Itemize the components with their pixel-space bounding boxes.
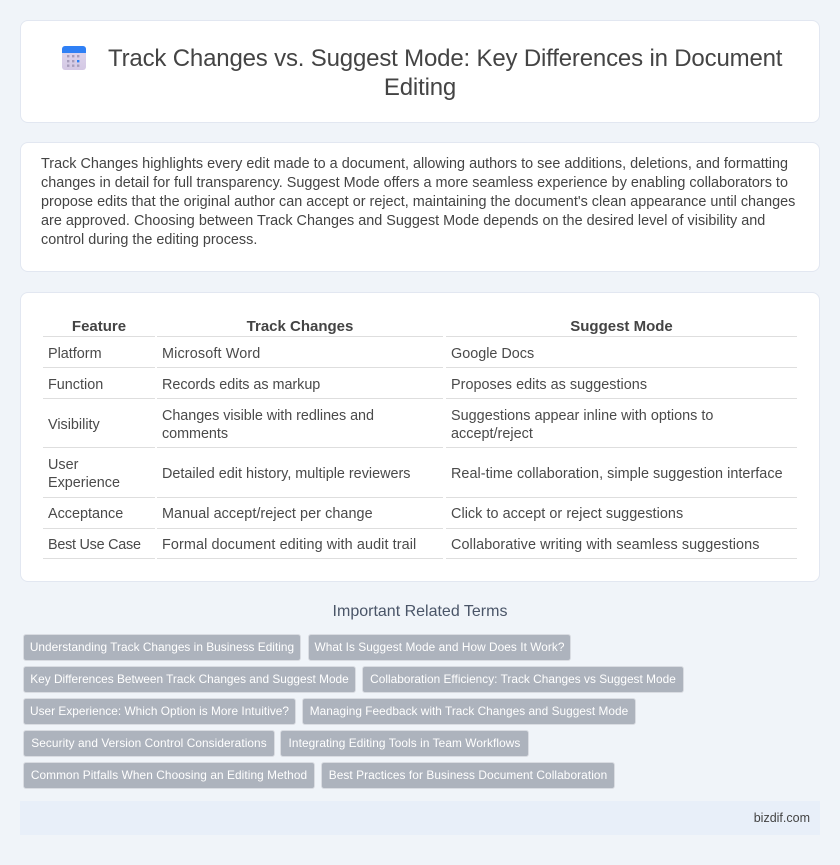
row: Visibility: Visibility (48, 417, 100, 433)
table header: Suggest Mode: Suggest Mode (570, 318, 673, 335)
title line 1: Track Changes vs. Suggest Mode: Key Differences in Document (108, 45, 782, 72)
Acceptance: Suggest Mode: Click to accept or reject suggestions (451, 506, 683, 522)
User Experience: Track Changes: Detailed edit history, multiple reviewers (162, 466, 410, 482)
panel: title card (20, 20, 820, 123)
panel: summary card (20, 142, 820, 272)
Platform: Suggest Mode: Google Docs (451, 346, 534, 362)
tag: Managing Feedback with Track Changes and Suggest Mode (310, 704, 628, 718)
tag: Understanding Track Changes in Business Editing (30, 640, 294, 654)
summary paragraph: Track Changes highlights every edit made to a document, allowing authors to see additions, deletions, and formatting (41, 156, 788, 172)
footer bar (20, 801, 820, 835)
tag (23, 634, 301, 661)
row: Acceptance: Acceptance (48, 506, 123, 522)
tag (362, 666, 684, 693)
icon: calendar (62, 46, 86, 70)
Best Use Case: Track Changes: Formal document editing with audit trail (162, 537, 416, 553)
related terms heading: Important Related Terms (333, 603, 507, 620)
Visibility: Suggest Mode: Suggestions appear inline with options to (451, 408, 713, 424)
Visibility: Track Changes: comments (162, 426, 228, 442)
Acceptance: Track Changes: Manual accept/reject per change (162, 506, 373, 522)
tag: Best Practices for Business Document Collaboration (329, 768, 607, 782)
tag: Collaboration Efficiency: Track Changes vs Suggest Mode (370, 672, 676, 686)
row: User Experience: User (48, 457, 78, 473)
tag (23, 730, 275, 757)
summary paragraph: propose edits that the original author can accept or reject, maintaining the document's clean appearance until changes (41, 194, 795, 210)
Function: Track Changes: Records edits as markup (162, 377, 320, 393)
tag (302, 698, 636, 725)
row: Function: Function (48, 377, 103, 393)
title line 2: Editing (384, 74, 456, 101)
tag: User Experience: Which Option is More Intuitive? (30, 704, 289, 718)
tag: Security and Version Control Considerations (31, 736, 267, 750)
tag (23, 762, 315, 789)
row: Platform: Platform (48, 346, 102, 362)
row: User Experience: Experience (48, 475, 120, 491)
table header: Feature: Feature (72, 318, 126, 335)
tag: Integrating Editing Tools in Team Workflows (289, 736, 520, 750)
summary paragraph (41, 156, 795, 248)
Visibility: Suggest Mode: accept/reject (451, 426, 533, 442)
summary paragraph: control during the editing process. (41, 232, 257, 248)
tag: Key Differences Between Track Changes and Suggest Mode (30, 672, 349, 686)
tag: What Is Suggest Mode and How Does It Work? (314, 640, 565, 654)
summary paragraph: are approved. Choosing between Track Changes and Suggest Mode depends on the desired level of visibility and (41, 213, 765, 229)
row: User Experience (48, 457, 120, 491)
tag (308, 634, 571, 661)
tag: Common Pitfalls When Choosing an Editing Method (31, 768, 307, 782)
table header: Track Changes: Track Changes (247, 318, 353, 335)
Function: Suggest Mode: Proposes edits as suggestions (451, 377, 647, 393)
Visibility: Track Changes (162, 408, 374, 442)
Platform: Track Changes: Microsoft Word (162, 346, 260, 362)
tag (321, 762, 615, 789)
footer source: bizdif.com (754, 811, 810, 825)
panel: comparison table card (20, 292, 820, 582)
Best Use Case: Suggest Mode: Collaborative writing with seamless suggestions (451, 537, 760, 553)
tag (280, 730, 529, 757)
row: Best Use Case: Best Use Case (48, 537, 141, 553)
tag (23, 698, 296, 725)
Visibility: Suggest Mode (451, 408, 713, 442)
tag (23, 666, 356, 693)
Visibility: Track Changes: Changes visible with redlines and (162, 408, 374, 424)
User Experience: Suggest Mode: Real-time collaboration, simple suggestion interface (451, 466, 783, 482)
summary paragraph: changes in detail for full transparency. Suggest Mode offers a more seamless experience by enabling collaborators to (41, 175, 788, 191)
